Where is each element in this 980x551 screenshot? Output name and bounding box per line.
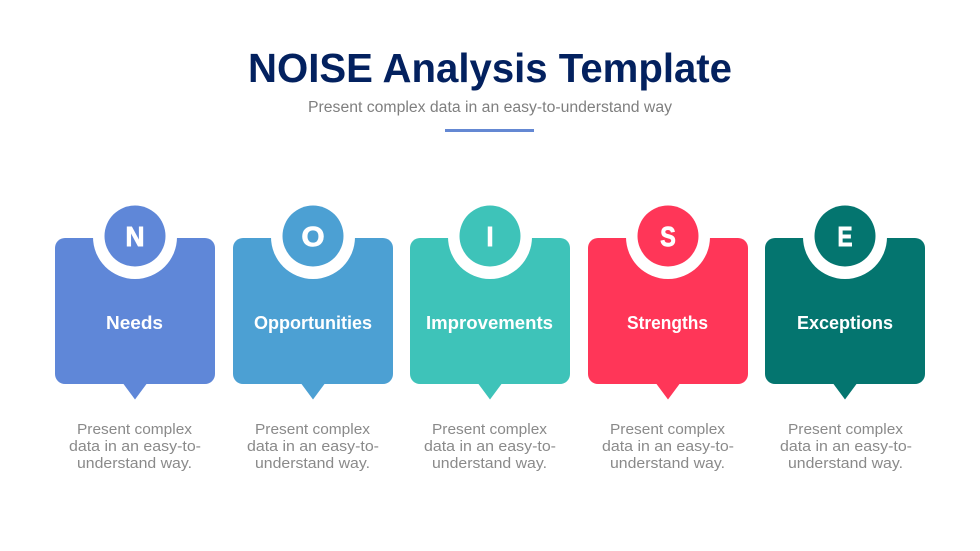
panel: needs: Present complex bbox=[77, 421, 193, 438]
panel: exceptions: E bbox=[838, 221, 852, 252]
panel: needs: N bbox=[126, 221, 144, 252]
panel: opportunities: O bbox=[302, 221, 324, 252]
panel: needs bbox=[55, 195, 215, 472]
title underline bbox=[445, 129, 534, 132]
panel: exceptions: Exceptions bbox=[797, 313, 893, 333]
panel: opportunities bbox=[233, 195, 393, 472]
panel: strengths: Strengths bbox=[627, 313, 708, 333]
panel: improvements: understand way. bbox=[432, 455, 547, 472]
panel: exceptions: data in an easy-to- bbox=[780, 438, 912, 455]
panel: improvements bbox=[410, 195, 570, 472]
panel: needs: data in an easy-to- bbox=[69, 438, 201, 455]
panel: strengths: data in an easy-to- bbox=[602, 438, 734, 455]
panel: improvements: Present complex bbox=[432, 421, 548, 438]
panel: opportunities: Present complex bbox=[255, 421, 371, 438]
panel: strengths: Present complex bbox=[610, 421, 726, 438]
panel: strengths: S bbox=[660, 221, 676, 252]
panel: needs: Needs bbox=[106, 313, 163, 333]
panel: exceptions: Present complex bbox=[788, 421, 904, 438]
panel: needs: understand way. bbox=[77, 455, 192, 472]
panel: improvements: data in an easy-to- bbox=[424, 438, 556, 455]
panel: strengths bbox=[588, 195, 748, 472]
panel: improvements: I bbox=[486, 221, 494, 252]
panel: opportunities: understand way. bbox=[255, 455, 370, 472]
subtitle: Present complex data in an easy-to-understand way bbox=[308, 99, 672, 116]
title: NOISE Analysis Template bbox=[248, 45, 732, 91]
panel: improvements: Improvements bbox=[426, 313, 553, 333]
panel: opportunities: data in an easy-to- bbox=[247, 438, 379, 455]
panel: exceptions bbox=[765, 195, 925, 472]
panel: opportunities: Opportunities bbox=[254, 313, 372, 333]
panel: exceptions: understand way. bbox=[788, 455, 903, 472]
panel: strengths: understand way. bbox=[610, 455, 725, 472]
